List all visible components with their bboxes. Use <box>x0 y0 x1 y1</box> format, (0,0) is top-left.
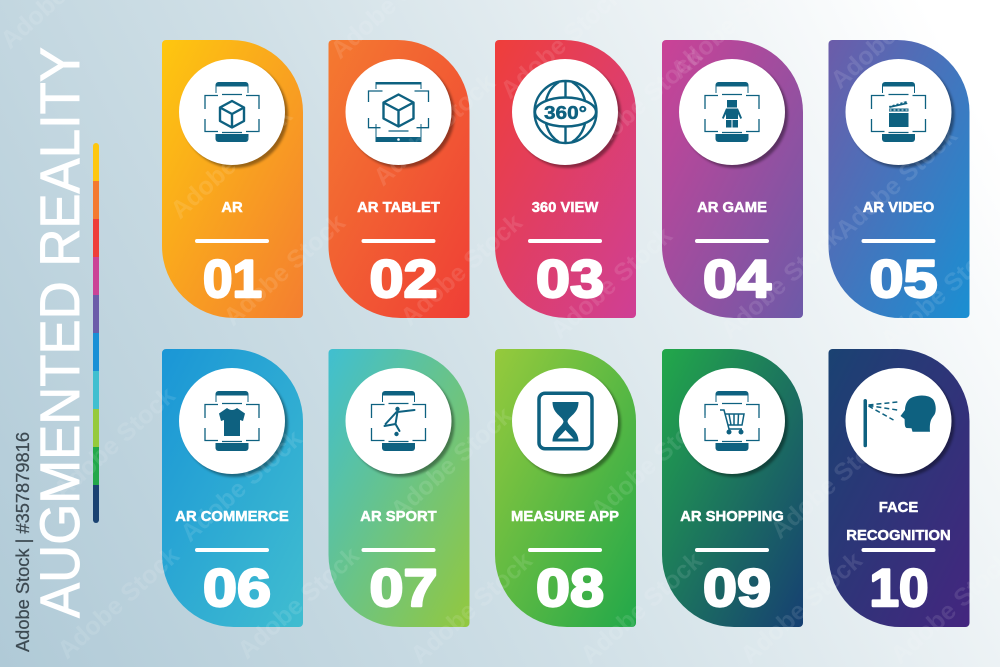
watermark pattern: Adobe Stock <box>52 541 185 664</box>
label: 360 VIEW <box>532 200 598 216</box>
side credit text: Adobe Stock | #357879816 <box>12 432 33 652</box>
icon: phone with footballer <box>372 391 426 451</box>
icon: phone with AR cube <box>205 82 259 142</box>
watermark pattern: Adobe Stock <box>368 68 501 191</box>
number: 06 <box>203 559 271 618</box>
title: augmented reality: AUGMENTED REALITY <box>28 47 91 618</box>
label: AR SPORT <box>360 509 437 525</box>
panel: AR Shopping 09 <box>662 349 803 627</box>
watermark pattern: Adobe Stock <box>48 381 181 504</box>
panel: AR Sport 07 <box>328 349 470 627</box>
number: 07 <box>370 559 438 618</box>
watermark pattern: Adobe Stock <box>575 546 708 667</box>
number: 10 <box>870 559 928 618</box>
icon: phone with clapperboard <box>872 82 926 142</box>
watermark pattern: Adobe Stock <box>175 424 308 547</box>
watermark pattern: Adobe Stock <box>575 41 708 164</box>
icon: hourglass <box>539 393 592 449</box>
watermark pattern: Adobe Stock <box>765 421 898 544</box>
watermark pattern: Adobe Stock <box>385 401 518 524</box>
label: AR <box>221 200 243 216</box>
number: 02 <box>370 250 438 309</box>
number: 03 <box>536 250 604 309</box>
label: AR GAME <box>697 200 767 216</box>
label: AR COMMERCE <box>175 509 289 525</box>
watermark pattern: Adobe Stock <box>830 121 963 244</box>
label: AR TABLET <box>357 200 440 216</box>
watermark pattern: Adobe Stock <box>395 208 528 331</box>
panel: AR Tablet 02 <box>328 40 470 318</box>
icon: phone with t-shirt <box>205 391 259 451</box>
label: MEASURE APP <box>511 509 619 525</box>
panel: AR Game 04 <box>662 40 803 318</box>
icon: 360 globe: 360° <box>544 102 587 123</box>
watermark pattern: Adobe Stock <box>585 401 718 524</box>
label line two: RECOGNITION <box>846 528 951 544</box>
panel: 360 View 03 <box>495 40 636 318</box>
number: 05 <box>870 250 938 309</box>
watermark pattern: Adobe Stock <box>232 541 365 664</box>
icon: face scanner <box>863 395 936 447</box>
label: FACE <box>879 500 918 516</box>
watermark pattern: Adobe Stock <box>218 208 351 331</box>
watermark pattern: Adobe Stock <box>545 221 678 344</box>
watermark pattern: Adobe Stock <box>735 546 868 667</box>
icon: phone with game robot <box>705 82 759 142</box>
label: AR VIDEO <box>863 200 934 216</box>
panel: Face Recognition 10 <box>828 349 970 627</box>
watermark pattern: Adobe Stock <box>165 101 298 224</box>
watermark pattern: Adobe Stock <box>715 221 848 344</box>
icon: 360 globe <box>534 81 596 143</box>
panel: AR Video 05 <box>828 40 970 318</box>
panel: Measure App 08 <box>495 349 636 627</box>
number: 04 <box>703 250 772 309</box>
color legend bar <box>93 143 99 523</box>
icon: tablet with AR cube <box>368 82 428 142</box>
watermark pattern: Adobe Stock <box>405 546 538 667</box>
number: 01 <box>203 250 262 309</box>
label: AR SHOPPING <box>680 509 784 525</box>
panel: AR 01 <box>162 40 303 318</box>
number: 09 <box>703 559 771 618</box>
number: 08 <box>536 559 604 618</box>
icon: phone with shopping cart <box>705 391 759 451</box>
panel: AR Commerce 06 <box>162 349 303 627</box>
